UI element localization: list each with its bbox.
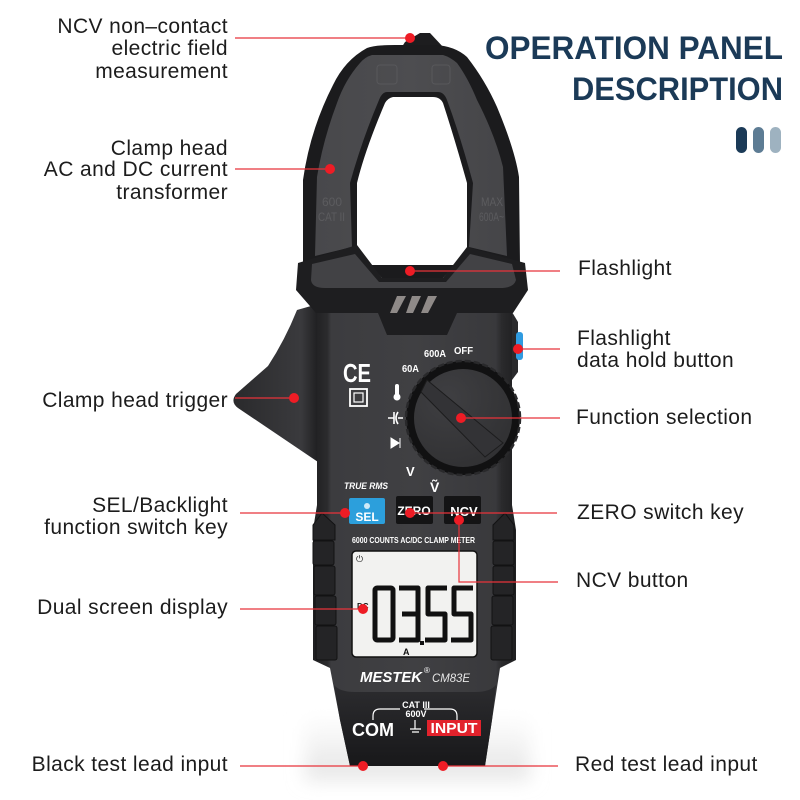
collar xyxy=(296,245,528,335)
brand: ® xyxy=(424,666,430,675)
callout: function selection xyxy=(456,406,752,429)
meter caption: 6000 COUNTS AC/DC CLAMP METER xyxy=(352,535,475,545)
CAT III bracket xyxy=(373,700,457,732)
COM label: COM xyxy=(352,720,394,740)
LCD display: A xyxy=(403,647,410,657)
callout: flashlight data hold button xyxy=(513,327,734,372)
callout: clamp head xyxy=(44,137,335,204)
clamp head: CAT II xyxy=(318,210,345,224)
callout: NCV button: NCV button xyxy=(576,569,689,592)
flashlight data hold button xyxy=(512,312,523,380)
meter body xyxy=(313,295,516,766)
dial labels: OFF xyxy=(454,345,474,357)
callout: dual screen display xyxy=(37,596,368,619)
CAT III bracket: 600V xyxy=(405,709,427,719)
LCD display: ⏻ xyxy=(356,554,363,564)
clamp head trigger xyxy=(233,304,318,462)
callout: red test lead input: Red test lead input xyxy=(575,753,758,776)
callout: NCV non-contact: measurement xyxy=(95,60,228,83)
callout: red test lead input xyxy=(438,753,758,776)
dial labels: 60A xyxy=(402,363,419,375)
clamp meter xyxy=(233,33,528,766)
callout: dual screen display: Dual screen display xyxy=(37,596,228,619)
ground shadow under meter xyxy=(305,715,530,780)
ZERO button xyxy=(396,496,433,524)
seven segment reading xyxy=(375,588,473,640)
callout: ZERO switch key: ZERO switch key xyxy=(577,501,744,524)
INPUT label: INPUT xyxy=(430,720,478,737)
CE and class II marks xyxy=(343,358,371,406)
clamp head: MAX xyxy=(481,195,503,209)
side grips xyxy=(313,513,514,660)
callout: NCV non-contact xyxy=(57,15,415,83)
title: operation panel description: OPERATION PANEL xyxy=(485,30,783,66)
CAT III bracket: CAT III xyxy=(402,700,430,710)
callout: SEL backlight: function switch key xyxy=(44,516,228,539)
callout: flashlight xyxy=(405,257,672,280)
callout: NCV non-contact: electric field xyxy=(112,37,228,60)
brand xyxy=(360,666,471,686)
NCV button xyxy=(444,496,481,524)
head markings xyxy=(377,65,450,84)
brand: MESTEK xyxy=(360,669,423,686)
callout: flashlight data hold button: Flashlight xyxy=(577,327,671,350)
dial labels: Ṽ xyxy=(430,478,440,495)
lower body shading xyxy=(334,685,496,766)
brand: CM83E xyxy=(432,671,471,685)
NCV button: NCV xyxy=(450,504,478,519)
clamp head: 600 xyxy=(322,195,342,209)
LCD display xyxy=(352,551,477,657)
light stripes xyxy=(390,296,437,313)
dial labels: 600A xyxy=(424,348,446,360)
dial labels xyxy=(388,345,474,495)
callout: SEL backlight: SEL/Backlight xyxy=(92,494,228,517)
callout: NCV non-contact: NCV non–contact xyxy=(57,15,228,38)
SEL button xyxy=(349,498,385,524)
clamp head xyxy=(303,33,520,278)
function selection knob xyxy=(406,361,520,475)
callout: ZERO switch key xyxy=(405,501,744,524)
true rms label: TRUE RMS xyxy=(344,481,389,492)
callout: SEL backlight xyxy=(44,494,350,539)
callout: clamp head trigger: Clamp head trigger xyxy=(42,389,228,412)
CE and class II marks: CE xyxy=(343,358,371,388)
callout: clamp head: transformer xyxy=(116,181,228,204)
callout: flashlight: Flashlight xyxy=(578,257,672,280)
callout: NCV button xyxy=(454,515,689,592)
LCD display: DC xyxy=(357,602,369,611)
ZERO button: ZERO xyxy=(397,504,431,518)
decorative pills xyxy=(736,127,781,153)
callout: black test lead input xyxy=(32,753,368,776)
callout: flashlight data hold button: data hold button xyxy=(577,349,734,372)
SEL button: SEL xyxy=(355,510,379,524)
title: operation panel description xyxy=(485,30,783,107)
clamp head: 600A~ xyxy=(479,210,504,224)
title: operation panel description: DESCRIPTION xyxy=(572,71,783,107)
callout: black test lead input: Black test lead input xyxy=(32,753,228,776)
callout: function selection: Function selection xyxy=(576,406,752,429)
callout: clamp head: AC and DC current xyxy=(44,158,228,181)
callout: clamp head: Clamp head xyxy=(111,137,228,160)
dial labels: V xyxy=(406,464,415,479)
